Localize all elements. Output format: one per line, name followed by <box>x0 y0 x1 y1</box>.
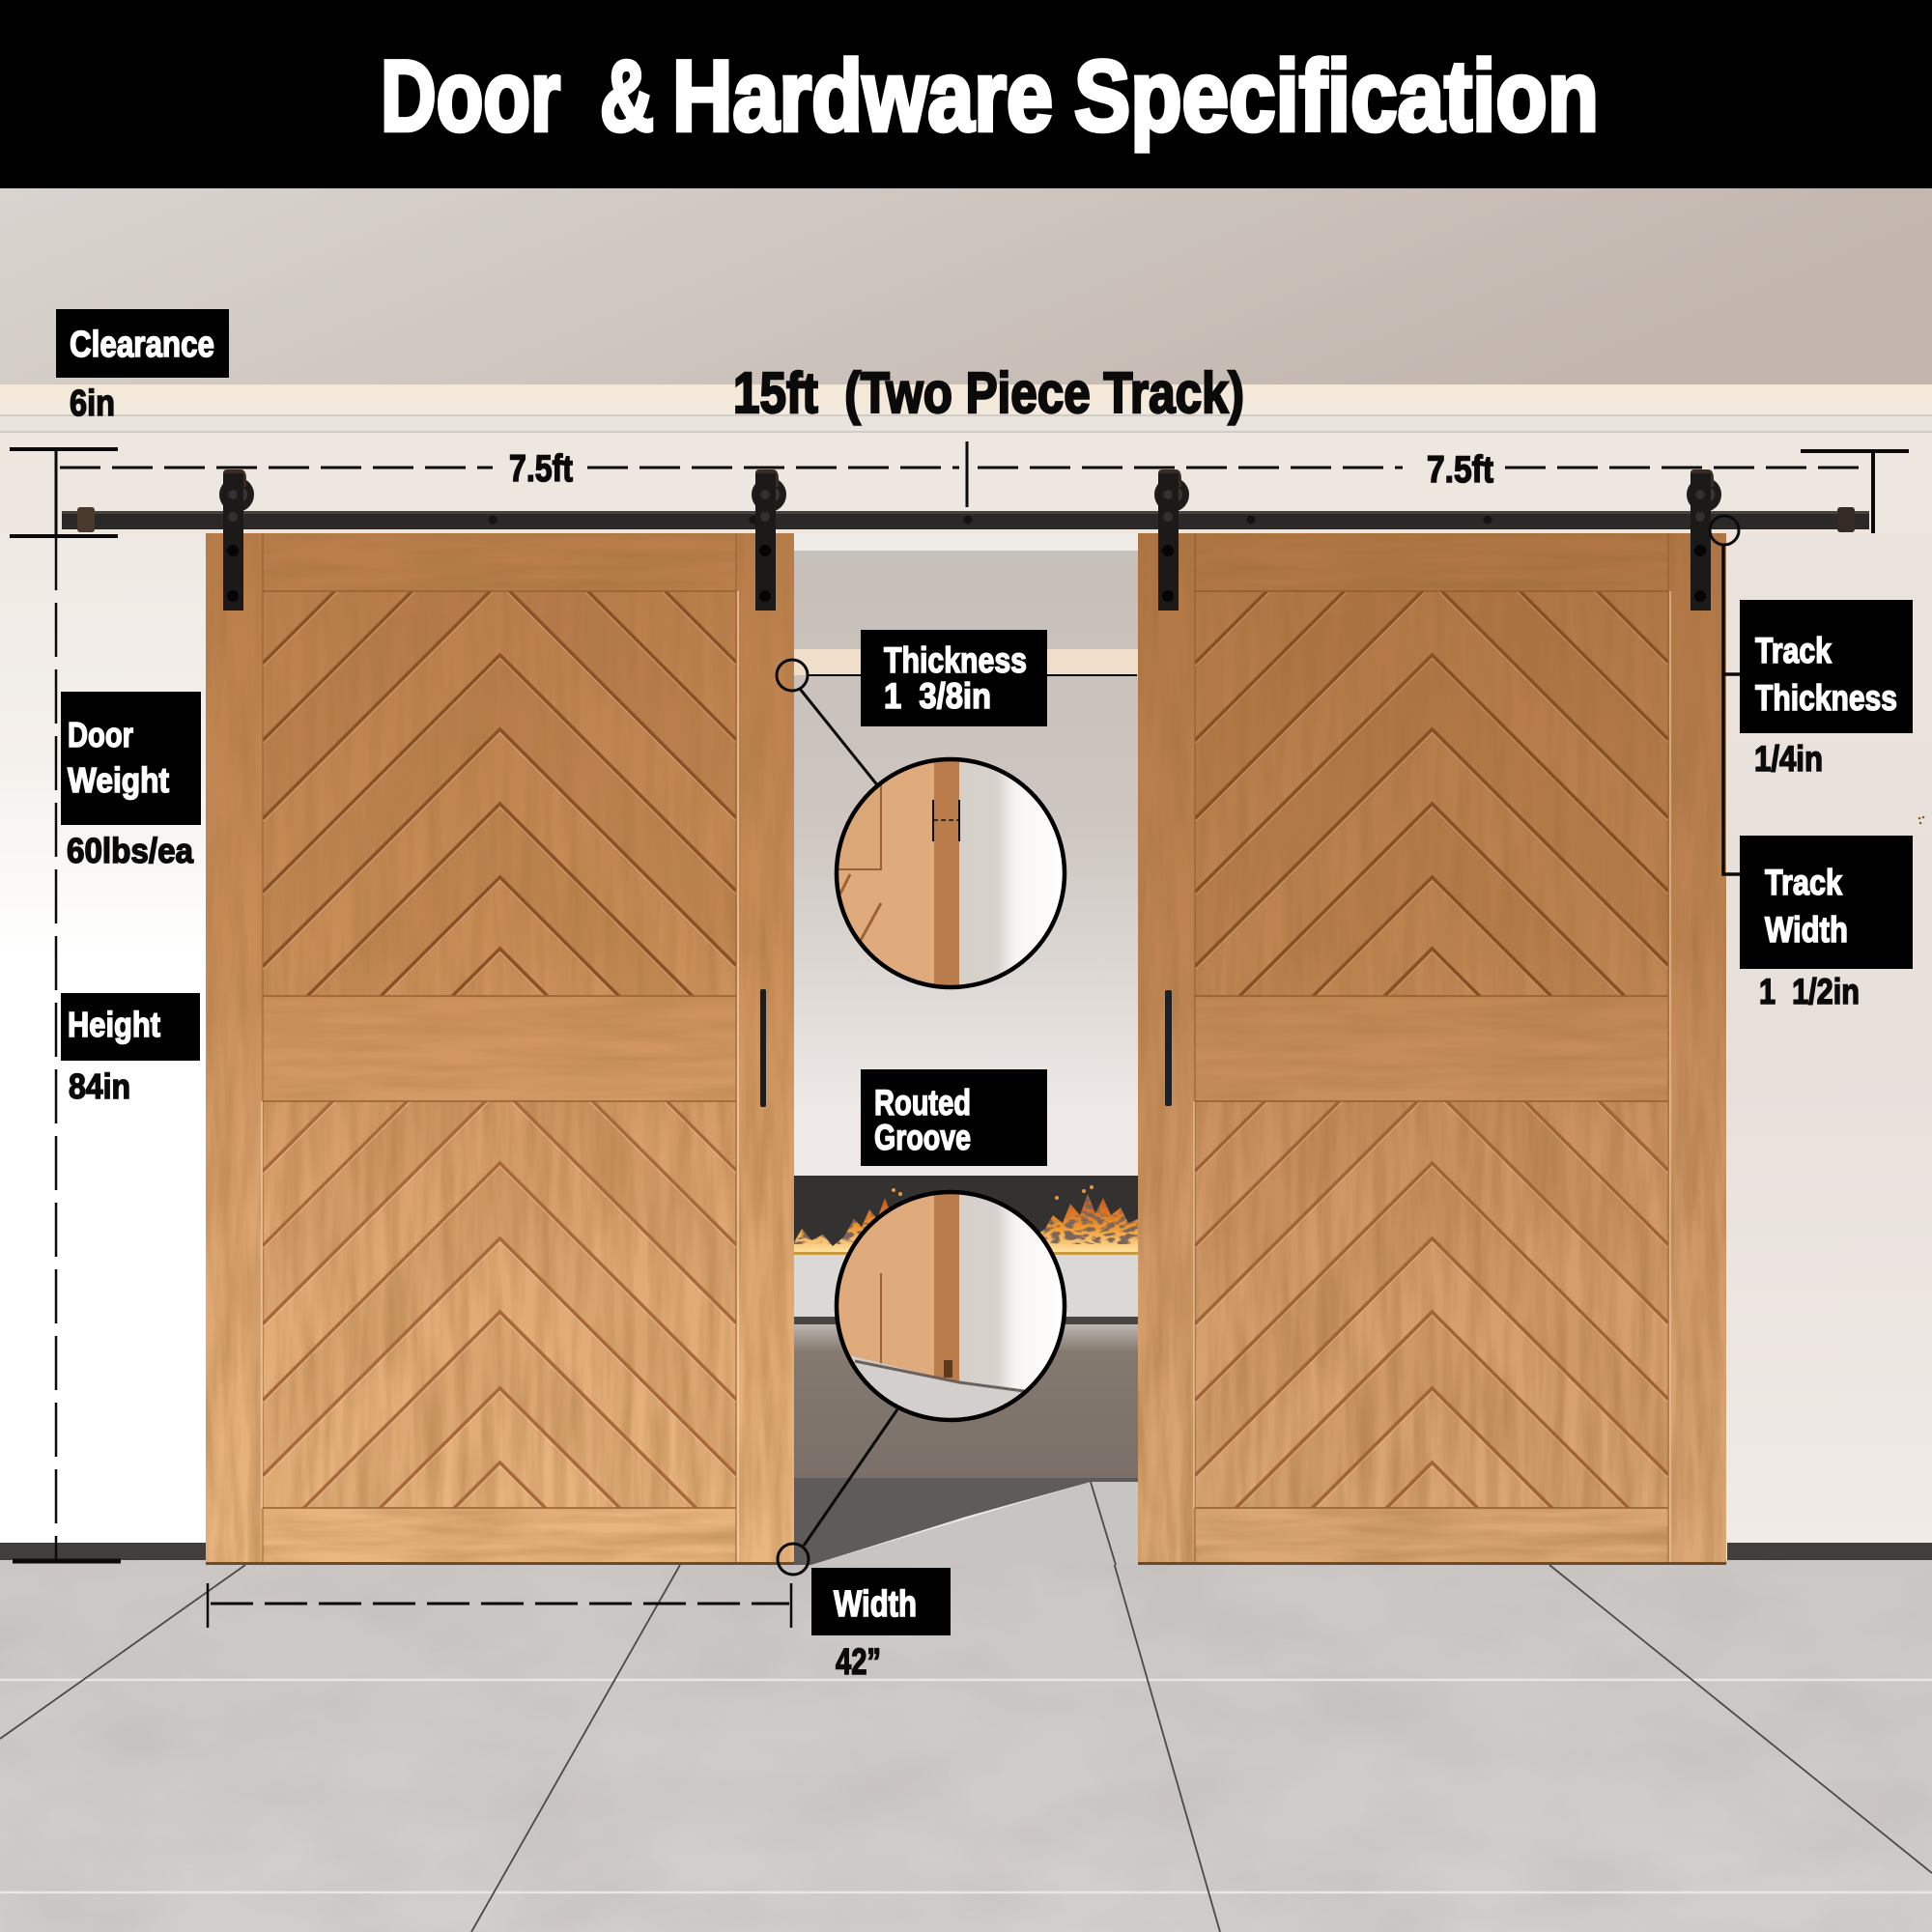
detail magnifier: routed groove <box>837 1192 1066 1422</box>
width connector line and marker <box>778 1409 897 1575</box>
callout: track thickness: 1/4in <box>1754 739 1823 779</box>
label: 7.5ft right: 7.5ft <box>1427 449 1493 491</box>
track dimension lines <box>60 441 1909 533</box>
sliding door: right <box>1138 426 1727 1702</box>
callout: clearance <box>56 309 229 424</box>
callout: height <box>61 993 200 1106</box>
opening between the doors <box>794 533 1138 1565</box>
callout: height: Height <box>68 1005 160 1044</box>
callout: thickness <box>861 630 1047 726</box>
callout: track width: Track <box>1765 863 1842 902</box>
baseboard <box>0 1543 1932 1561</box>
callout: routed groove <box>861 1069 1047 1166</box>
total track length label: 15ft (Two Piece Track) <box>733 361 1244 425</box>
title banner: & <box>600 41 654 153</box>
sliding door: left <box>206 426 794 1702</box>
callout: routed groove: Routed <box>874 1083 971 1122</box>
callout: door weight: 60lbs/ea <box>67 831 194 870</box>
floor <box>0 1482 1932 1932</box>
callout: width <box>811 1568 951 1683</box>
background wall and ceiling <box>0 188 1932 1544</box>
callout: track thickness: Thickness <box>1755 678 1897 718</box>
hanger: door 2 right <box>1687 469 1721 611</box>
callout: track width: Width <box>1765 910 1848 950</box>
wall speck <box>1919 817 1923 823</box>
callout: width: Width <box>834 1584 917 1625</box>
callout: width: 42” <box>836 1642 881 1683</box>
callout: clearance: Clearance <box>70 325 214 365</box>
clearance bracket and height dimension line <box>10 449 121 1561</box>
hanger: door 2 left <box>1154 469 1189 611</box>
callout: door weight: Door <box>68 715 133 754</box>
door handle: right <box>1165 990 1172 1106</box>
callout: track thickness: Track <box>1755 631 1832 670</box>
callout: clearance: 6in <box>70 384 115 424</box>
track callout connector lines and marker <box>1710 516 1740 874</box>
fireplace flames <box>794 1187 1138 1255</box>
detail magnifier: door thickness <box>837 759 1066 989</box>
title banner: Door <box>381 41 560 153</box>
callout: height: 84in <box>69 1066 130 1106</box>
callout: door weight <box>61 692 201 870</box>
width dimension line <box>208 1583 791 1628</box>
title banner: Hardware <box>672 41 1053 153</box>
callout: thickness: Thickness <box>884 640 1027 680</box>
callout: thickness: 1 3/8in <box>884 676 991 716</box>
door handle: left <box>760 989 766 1107</box>
label: 7.5ft left: 7.5ft <box>509 448 573 490</box>
barn door track <box>62 507 1869 532</box>
callout: track width: 1 1/2in <box>1759 972 1860 1011</box>
callout: routed groove: Groove <box>874 1118 971 1157</box>
callout: track thickness <box>1740 600 1913 779</box>
title banner <box>0 0 1932 188</box>
hanger: door 1 right <box>752 469 786 611</box>
hanger: door 1 left <box>219 469 254 611</box>
callout: track width <box>1740 836 1913 1011</box>
title banner: Specification <box>1074 41 1599 153</box>
callout: door weight: Weight <box>68 760 169 800</box>
thickness connector lines and marker <box>777 660 1137 787</box>
